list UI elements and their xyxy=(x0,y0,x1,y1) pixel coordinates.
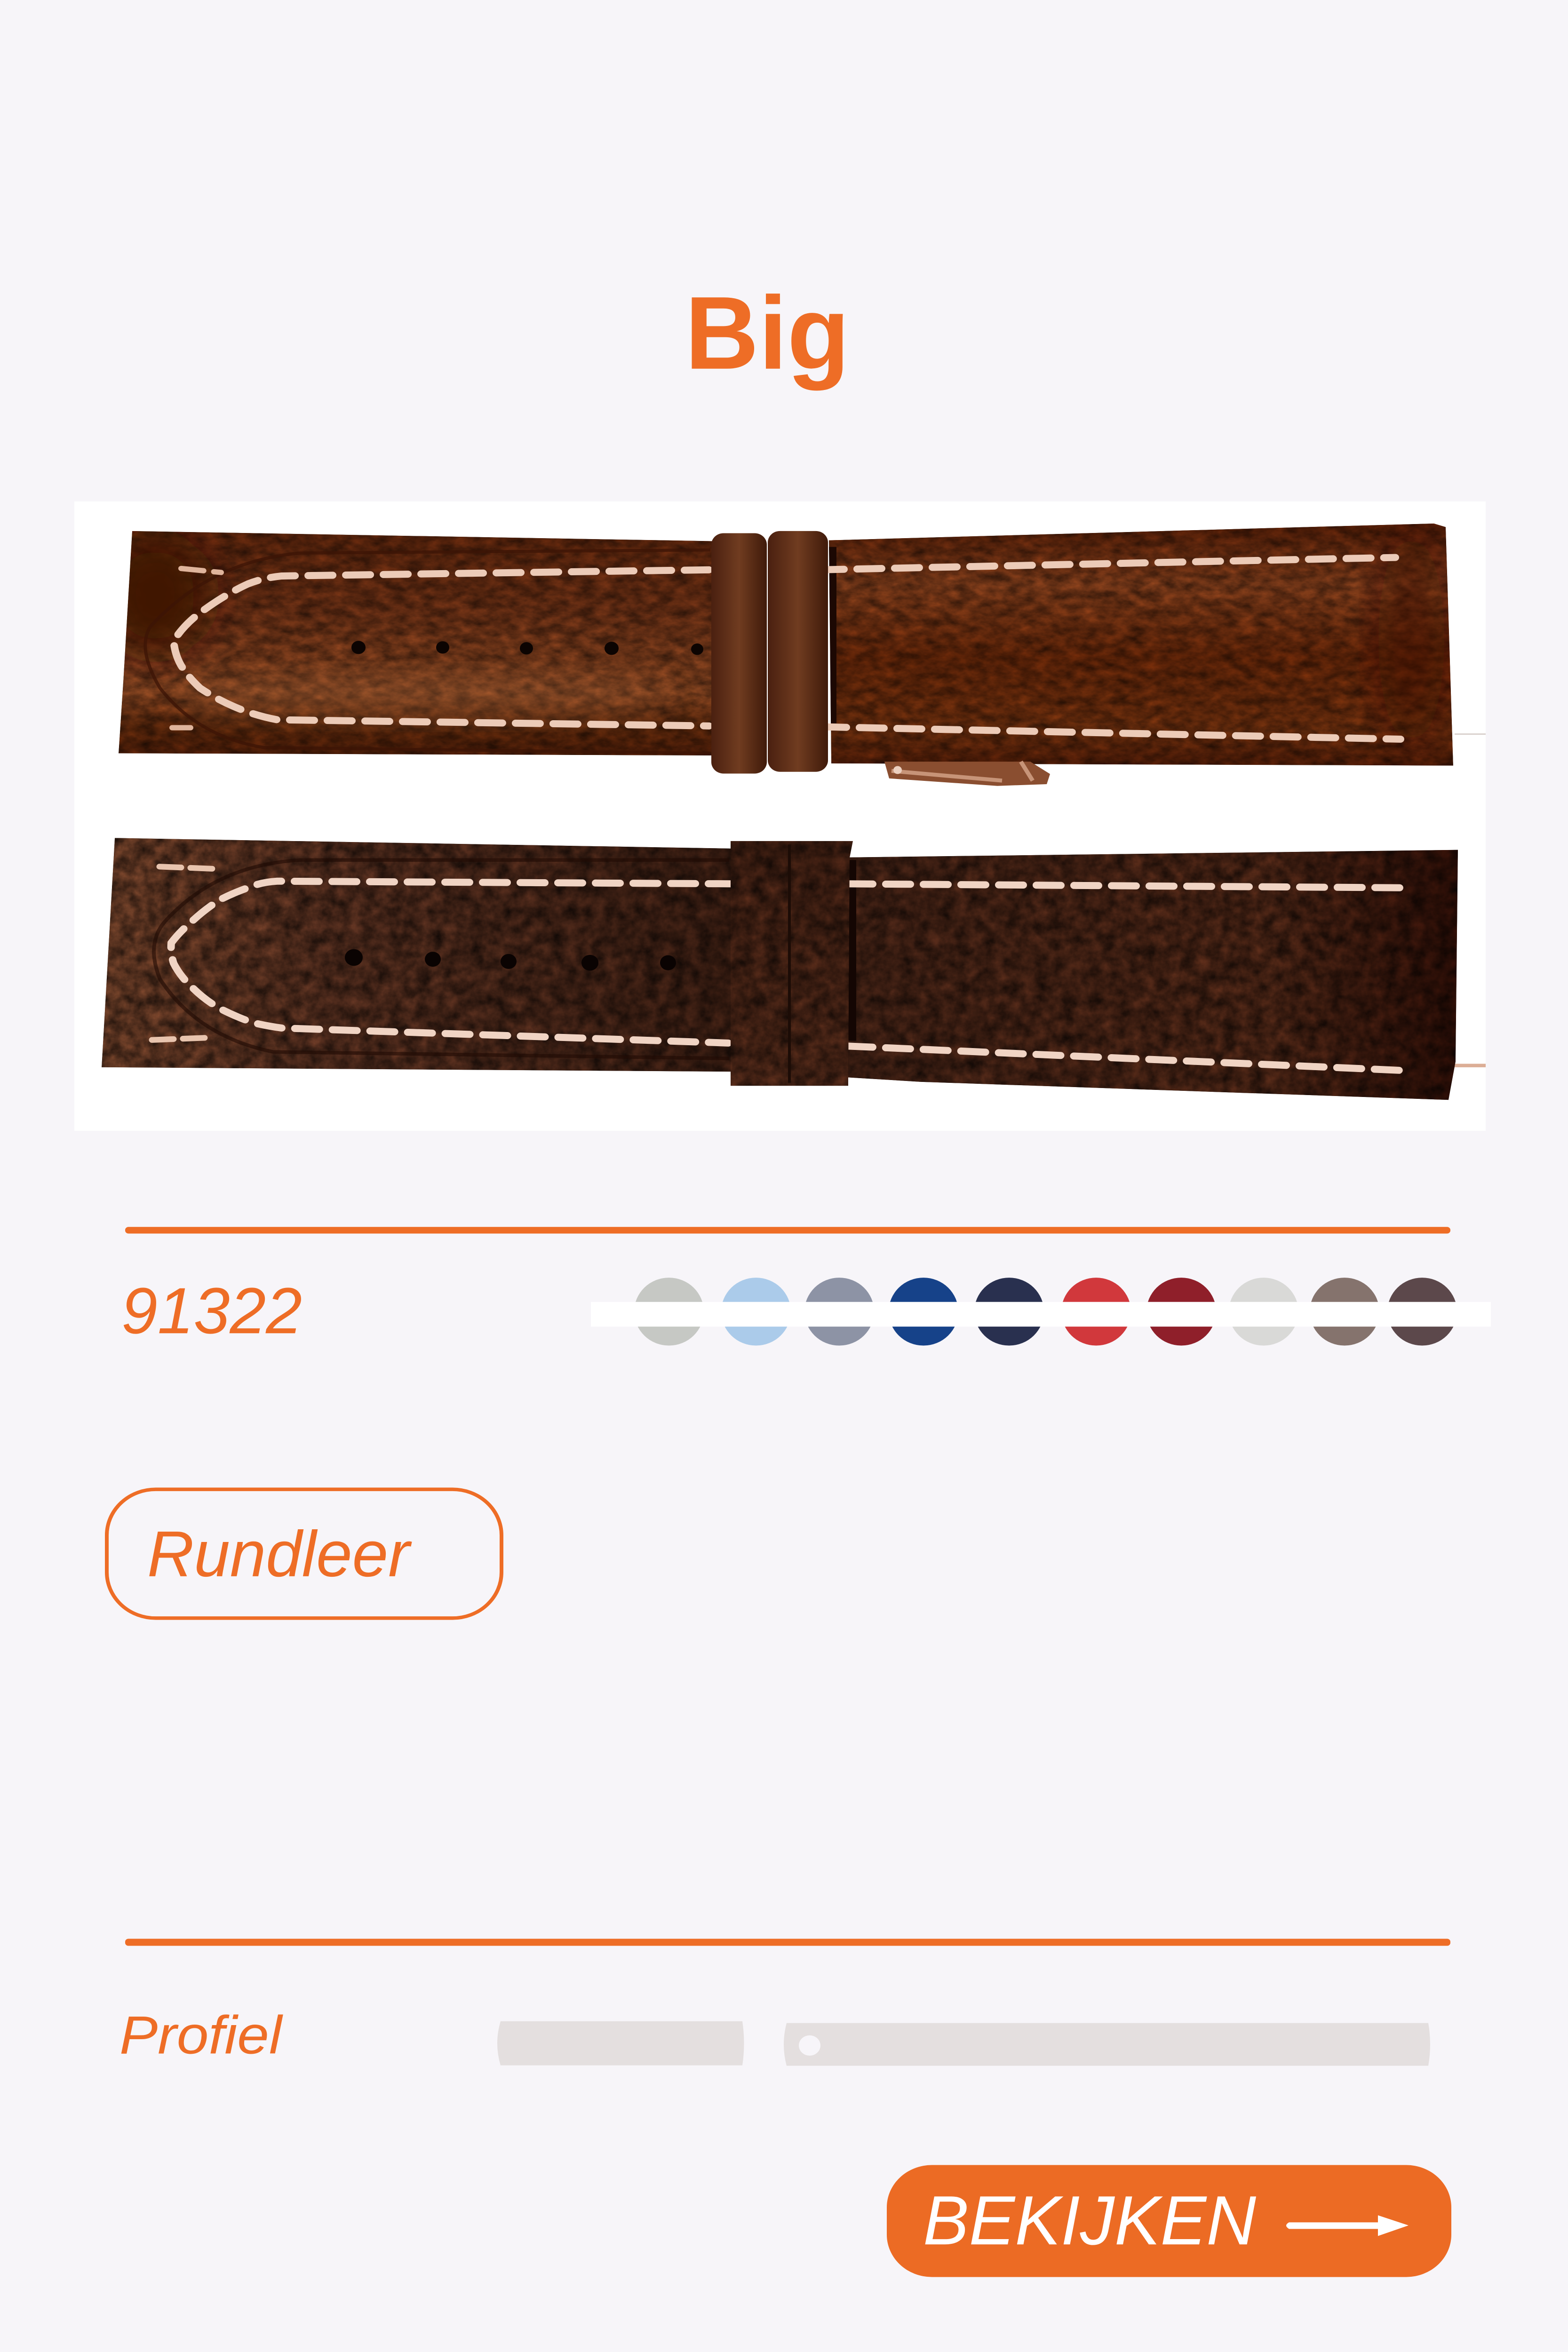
stitching xyxy=(820,557,1395,570)
colour swatches xyxy=(591,1278,1491,1345)
photo background xyxy=(74,501,1486,1131)
bottom strap: long piece xyxy=(102,838,733,1072)
stitching: tail ends xyxy=(172,569,221,728)
stitching: tail ends xyxy=(152,866,215,1040)
swatch: dark taupe xyxy=(1387,1278,1457,1345)
top strap: short piece xyxy=(820,524,1453,766)
stitching xyxy=(848,884,1403,888)
white band across swatches xyxy=(591,1302,1491,1327)
swatch: red xyxy=(1061,1278,1131,1345)
strap profile: short piece xyxy=(497,2021,744,2066)
top strap: long piece xyxy=(103,531,714,755)
button shape xyxy=(887,2165,1451,2277)
strap tail stub: bottom xyxy=(1455,1064,1486,1067)
stitching xyxy=(174,570,709,726)
profile label: Profiel xyxy=(119,2005,283,2065)
divider line: top xyxy=(125,1227,1450,1233)
divider line: bottom xyxy=(125,1939,1450,1946)
bottom strap: short piece xyxy=(848,850,1458,1100)
title: Big xyxy=(685,276,850,391)
icon: arrow xyxy=(1286,2215,1409,2236)
strap profile: long piece xyxy=(784,2023,1430,2066)
swatch: navy xyxy=(974,1278,1044,1345)
strap tail stub: top xyxy=(1455,733,1486,735)
swatch: blue grey xyxy=(804,1278,874,1345)
article number: 91322 xyxy=(121,1274,302,1347)
buckle holes xyxy=(345,949,676,971)
profile hole xyxy=(799,2035,820,2056)
buckle holes xyxy=(351,641,703,655)
bottom strap keepers xyxy=(731,841,853,1086)
top strap keepers xyxy=(711,531,828,773)
material tag xyxy=(107,1489,501,1618)
swatch: royal blue xyxy=(889,1278,958,1345)
tag outline xyxy=(107,1489,501,1618)
button label: BEKIJKEN xyxy=(923,2182,1256,2259)
product photo: two leather watch straps xyxy=(74,501,1486,1131)
swatch: pale grey xyxy=(1229,1278,1298,1345)
stitching xyxy=(171,881,733,1043)
tag label: Rundleer xyxy=(147,1518,412,1590)
view button xyxy=(887,2165,1451,2277)
swatch: dark red xyxy=(1146,1278,1216,1345)
swatch: light grey xyxy=(634,1278,704,1345)
swatch: taupe xyxy=(1310,1278,1379,1345)
clasp under the top strap xyxy=(884,762,1050,786)
swatch: light blue xyxy=(721,1278,791,1345)
